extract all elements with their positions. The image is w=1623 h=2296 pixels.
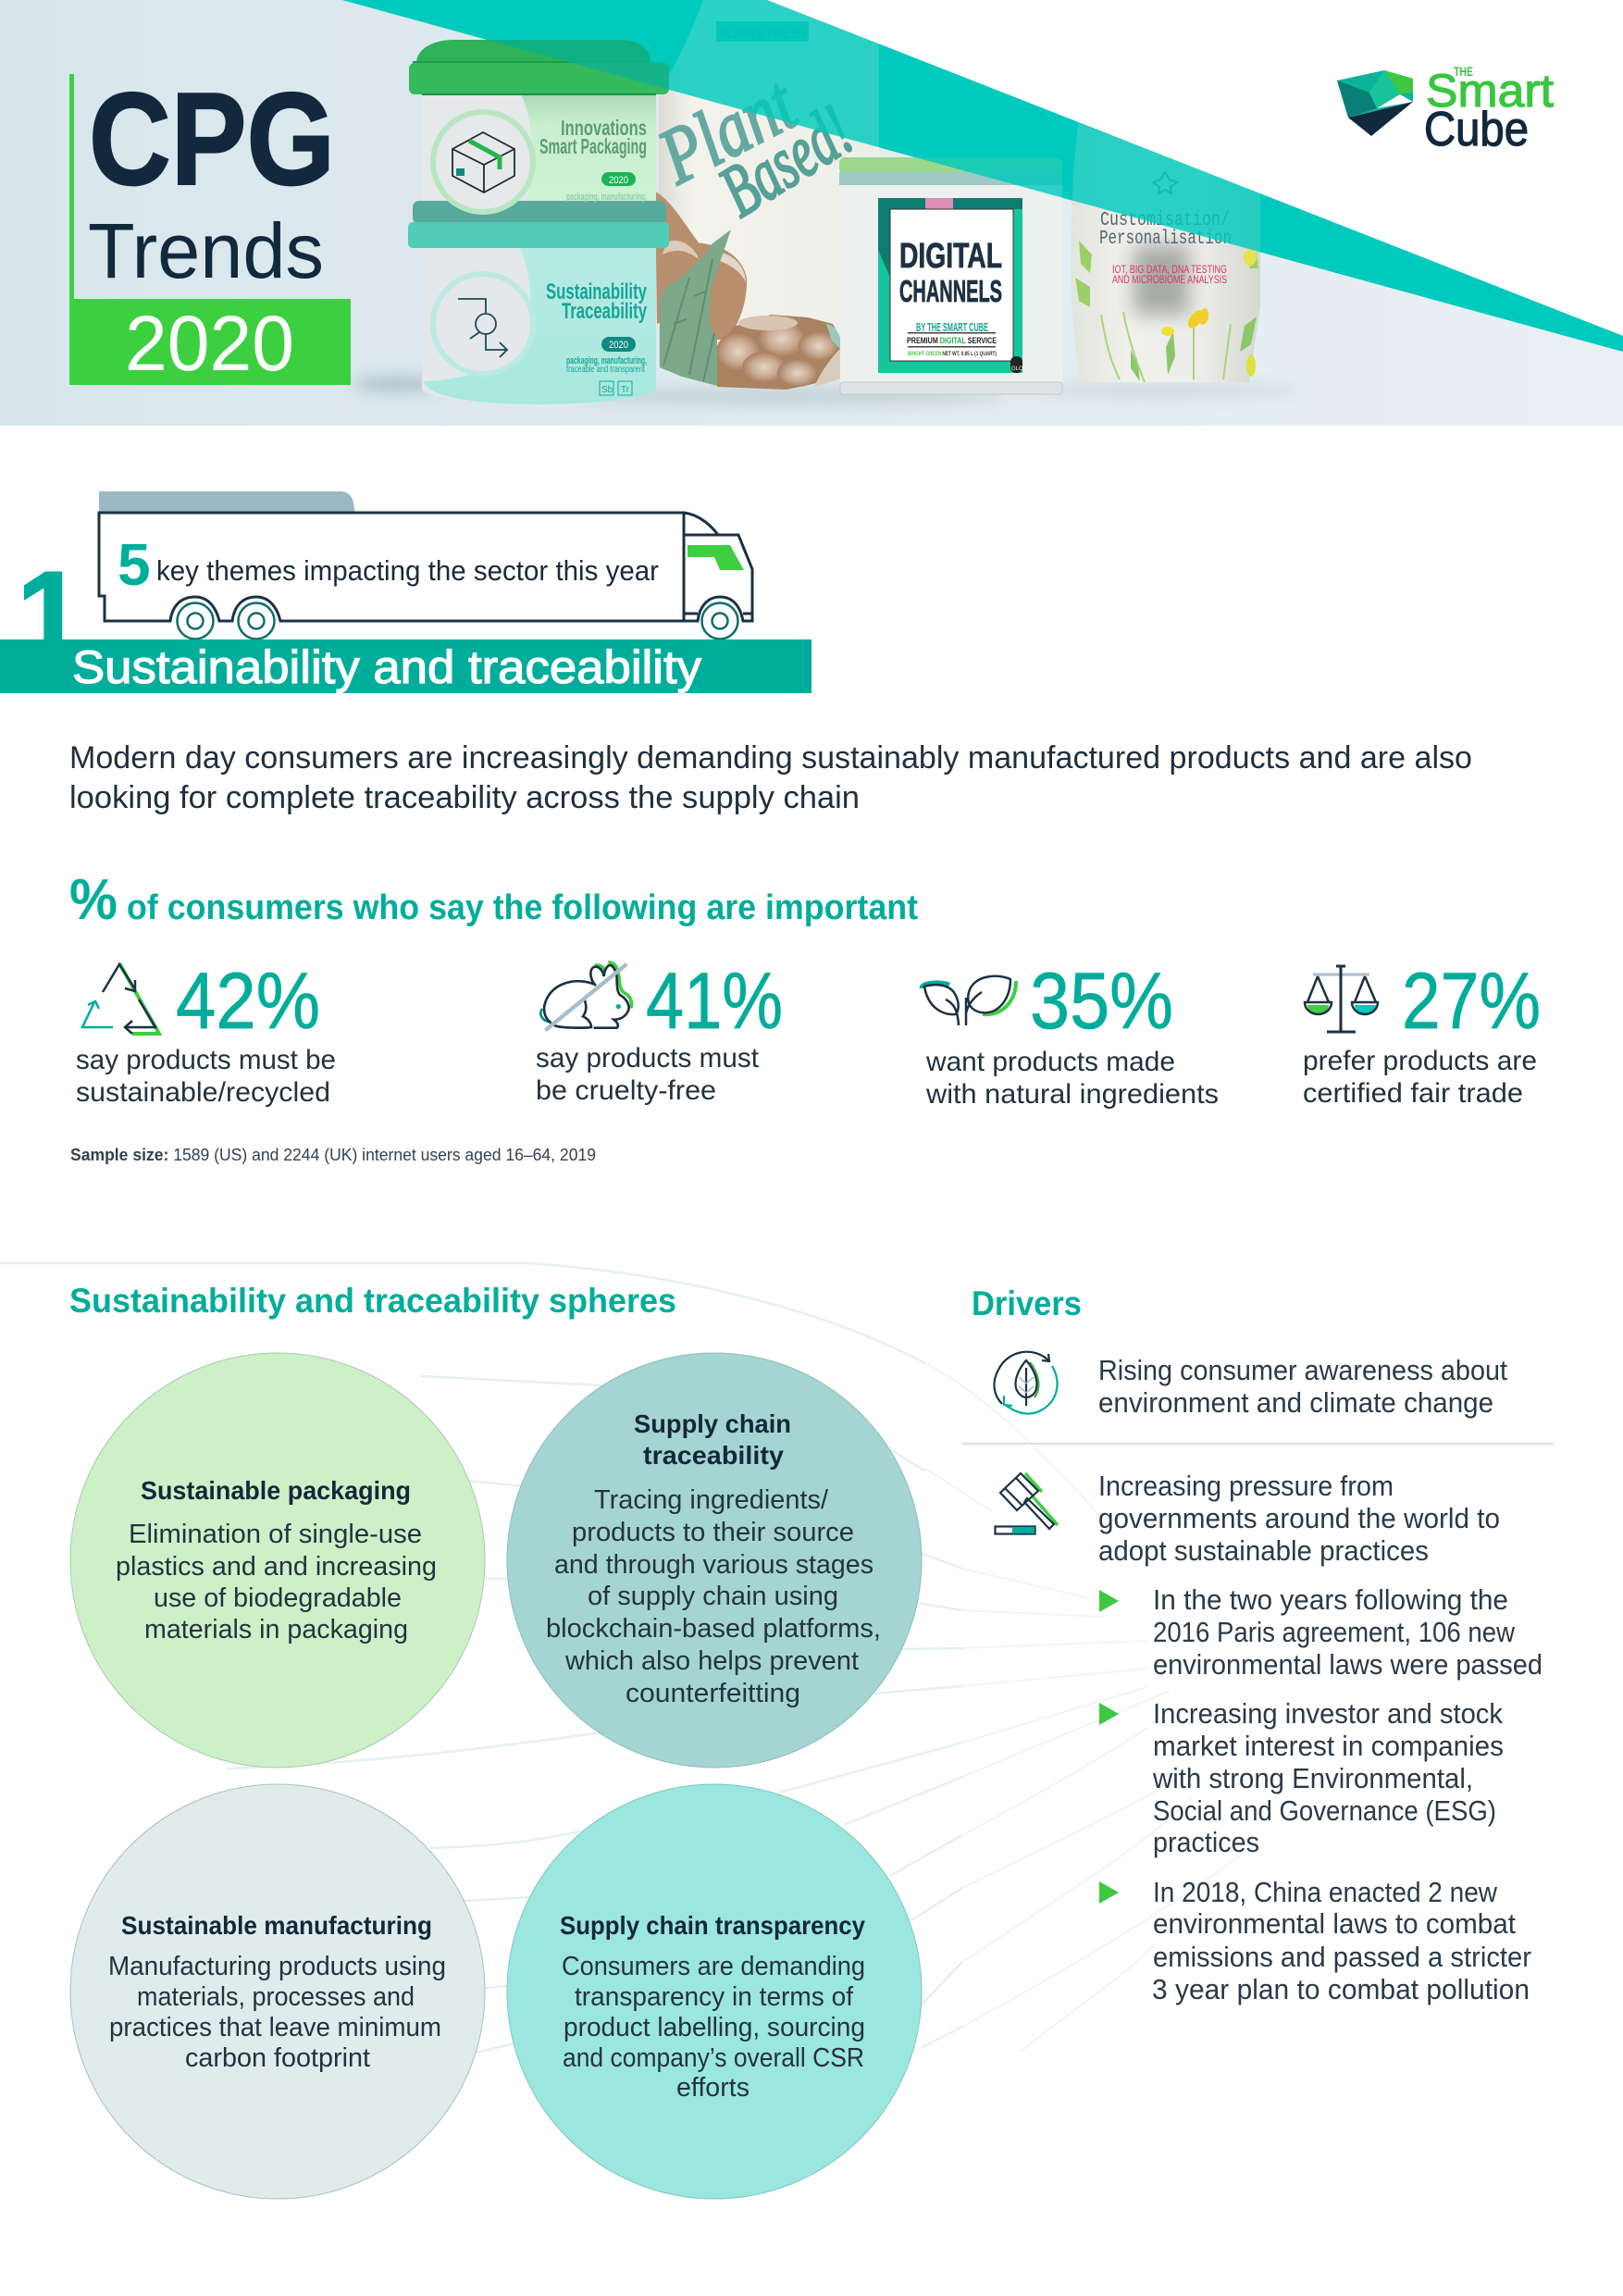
sphere: supply chain traceability: blockchain-based platforms,	[546, 1614, 881, 1644]
sphere: supply chain traceability: and through various stages	[554, 1550, 873, 1580]
tub: innovations smart packaging: Smart Packaging	[539, 134, 647, 158]
driver: consumer awareness: environment and climate change	[1098, 1386, 1493, 1419]
title: Trends: Trends	[88, 207, 324, 294]
icon: leaf in cycle	[994, 1352, 1058, 1414]
bullet: China laws: 3 year plan to combat pollution	[1152, 1973, 1530, 2005]
sphere: sustainable packaging: Elimination of single-use	[129, 1520, 422, 1549]
year: 2020	[125, 300, 294, 387]
sphere: sustainable manufacturing: materials, processes and	[137, 1982, 415, 2012]
sphere: supply chain transparency: and company’s overall CSR	[563, 2043, 864, 2073]
bullet: investor interest: market interest in companies	[1153, 1730, 1504, 1762]
bullet: Paris agreement: environmental laws were passed	[1153, 1648, 1542, 1681]
stat: 35 percent: 35%	[1030, 957, 1173, 1046]
section title bar: Sustainability and traceability	[72, 641, 701, 693]
bullet: investor interest: practices	[1153, 1826, 1259, 1858]
bullet: investor interest: with strong Environmental,	[1152, 1762, 1473, 1794]
tub: innovations smart packaging: packaging, manufacturing,	[566, 192, 647, 203]
truck	[99, 491, 752, 639]
stat: 27 percent	[1303, 957, 1541, 1109]
plant based pouch	[644, 0, 879, 390]
bullet: investor interest	[1099, 1697, 1504, 1858]
tin: digital channels: GLO	[1011, 366, 1023, 372]
stat: 42 percent: sustainable/recycled	[76, 1077, 330, 1108]
bullet: China laws: environmental laws to combat	[1153, 1907, 1516, 1940]
title: CPG: CPG	[89, 66, 335, 213]
tub: sustainability traceability: traceable and transparent	[566, 365, 645, 375]
driver: consumer awareness	[994, 1352, 1507, 1419]
title block	[69, 66, 351, 387]
tub: innovations smart packaging: 2020	[609, 175, 628, 186]
driver: government pressure: adopt sustainable practices	[1098, 1534, 1429, 1567]
logo: Smart	[1426, 65, 1554, 117]
logo	[1337, 64, 1554, 156]
stat: 27 percent: 27%	[1402, 957, 1541, 1046]
tin: digital channels: BRIGHT GREEN NET WT. 0.85 L (1 QUART)	[908, 352, 997, 357]
pouch: customisation: Personalisation	[1099, 229, 1232, 250]
sphere: sustainable manufacturing: Sustainable manufacturing	[121, 1911, 432, 1940]
stat: 27 percent: certified fair trade	[1303, 1078, 1523, 1109]
stat: 35 percent: with natural ingredients	[925, 1079, 1219, 1110]
sphere: sustainable packaging: plastics and and increasing	[116, 1552, 437, 1582]
plant based lettering: Plant	[644, 58, 811, 201]
stats heading: of consumers who say the following are important	[127, 888, 918, 927]
tub: sustainability traceability: Sb	[601, 385, 613, 395]
hero banner	[0, 0, 1623, 426]
sphere: sustainable manufacturing: Manufacturing products using	[108, 1952, 446, 1981]
sphere: supply chain transparency: Supply chain transparency	[560, 1911, 865, 1940]
always fresh label	[716, 21, 809, 42]
icon: leaves	[922, 976, 1016, 1025]
icon: rabbit with slash	[540, 962, 631, 1030]
tin: digital channels	[839, 157, 1062, 394]
logo: Cube	[1424, 103, 1529, 156]
sphere: supply chain transparency	[507, 1784, 922, 2199]
bullet: Paris agreement: 2016 Paris agreement, 106 new	[1153, 1616, 1516, 1648]
stat: 41 percent: 41%	[646, 957, 783, 1046]
bullet: China laws: In 2018, China enacted 2 new	[1153, 1876, 1498, 1908]
sphere: supply chain traceability: counterfeitting	[626, 1679, 800, 1708]
icon: scales	[1305, 966, 1378, 1032]
pouch: customisation: Customisation/	[1100, 210, 1230, 231]
sphere: supply chain traceability: products to their source	[572, 1518, 854, 1547]
spheres heading: Sustainability and traceability spheres	[69, 1282, 676, 1320]
stat: 42 percent	[76, 957, 336, 1108]
sphere: sustainable packaging: materials in packaging	[144, 1615, 408, 1644]
icon: recycle	[82, 963, 159, 1034]
stat: 42 percent: say products must be	[76, 1045, 336, 1075]
bullet: Paris agreement: In the two years following the	[1153, 1583, 1508, 1616]
stat: 41 percent: say products must	[536, 1043, 760, 1074]
tub: sustainability traceability: Traceability	[562, 299, 647, 324]
intro paragraph	[69, 740, 1472, 815]
tin: digital channels: PREMIUM DIGITAL SERVICE	[907, 336, 997, 345]
truck text: number: 5	[118, 531, 151, 598]
driver: government pressure: governments around the world to	[1098, 1502, 1500, 1534]
stat: 42 percent: 42%	[176, 957, 320, 1046]
stat: 35 percent	[922, 957, 1219, 1110]
wheels	[178, 603, 738, 639]
sphere: sustainable packaging: Sustainable packaging	[141, 1476, 411, 1505]
bullet: China laws: emissions and passed a stricter	[1153, 1941, 1531, 1973]
tub: innovations smart packaging	[409, 40, 669, 212]
tub: sustainability traceability: packaging, manufacturing,	[566, 355, 647, 366]
sphere: supply chain traceability: Tracing ingredients/	[594, 1485, 829, 1515]
tub: sustainability traceability: Sustainability	[546, 279, 647, 304]
drivers heading: Drivers	[972, 1285, 1082, 1322]
intro paragraph: Modern day consumers are increasingly demanding sustainably manufactured products and are also	[69, 740, 1472, 776]
icon: gavel	[996, 1473, 1058, 1534]
sphere: sustainable packaging	[70, 1353, 485, 1768]
teal diagonal band	[342, 0, 1623, 352]
always fresh label: ALWAYS FRESH	[719, 26, 806, 42]
plant based pouch: Based!	[706, 90, 867, 232]
sphere: sustainable manufacturing: practices that leave minimum	[109, 2013, 441, 2042]
sphere: supply chain traceability: Supply chain	[634, 1409, 791, 1438]
sphere: supply chain transparency: transparency in terms of	[575, 1982, 854, 2012]
sphere: supply chain traceability: which also helps prevent	[564, 1646, 859, 1676]
stat: 41 percent	[536, 957, 783, 1106]
stats heading: %	[69, 868, 118, 932]
driver: government pressure	[996, 1470, 1500, 1567]
tin: digital channels: CHANNELS	[899, 274, 1002, 308]
year box	[69, 299, 351, 385]
intro paragraph: looking for complete traceability across the supply chain	[69, 780, 860, 815]
sphere: sustainable manufacturing	[70, 1784, 485, 2199]
sphere: supply chain traceability	[507, 1353, 922, 1768]
driver: consumer awareness: Rising consumer awareness about	[1098, 1354, 1507, 1386]
stat: 35 percent: want products made	[925, 1047, 1175, 1077]
driver: government pressure: Increasing pressure from	[1098, 1470, 1394, 1502]
tub: sustainability traceability	[408, 201, 669, 404]
sphere: supply chain transparency: product labelling, sourcing	[564, 2013, 865, 2042]
pouch: customisation	[1071, 123, 1260, 382]
sphere: supply chain transparency: Consumers are demanding	[562, 1952, 865, 1981]
pouch: customisation: IOT, BIG DATA, DNA TESTING	[1112, 263, 1227, 276]
bullet: investor interest: Increasing investor and stock	[1153, 1697, 1503, 1730]
stat: 41 percent: be cruelty-free	[536, 1075, 716, 1106]
bullet: investor interest: Social and Governance (ESG)	[1153, 1794, 1496, 1827]
tub: sustainability traceability: Tr	[621, 385, 630, 395]
tub: sustainability traceability: 2020	[609, 340, 628, 351]
tin: digital channels: BY THE SMART CUBE	[916, 320, 988, 334]
sample size note: Sample size: 1589 (US) and 2244 (UK) internet users aged 16–64, 2019	[70, 1146, 596, 1164]
logo wordmark: THE	[1454, 64, 1473, 79]
sphere: sustainable manufacturing: carbon footprint	[185, 2043, 370, 2073]
pouch: customisation: AND MICROBIOME ANALYSIS	[1112, 273, 1227, 286]
tin: digital channels: DIGITAL	[899, 237, 1002, 276]
sphere: supply chain traceability: of supply chain using	[588, 1582, 838, 1611]
large number 1: 1	[17, 546, 83, 681]
sphere: supply chain traceability: traceability	[643, 1441, 784, 1470]
sphere: sustainable packaging: use of biodegradable	[154, 1583, 402, 1613]
bullet: China laws	[1099, 1876, 1531, 2005]
truck text: caption: key themes impacting the sector this year	[156, 554, 659, 587]
stat: 27 percent: prefer products are	[1303, 1046, 1537, 1076]
sphere: supply chain transparency: efforts	[676, 2073, 750, 2103]
stats heading	[69, 868, 918, 932]
tub: innovations smart packaging: Innovations	[561, 116, 647, 140]
bullet: Paris agreement	[1099, 1583, 1542, 1681]
